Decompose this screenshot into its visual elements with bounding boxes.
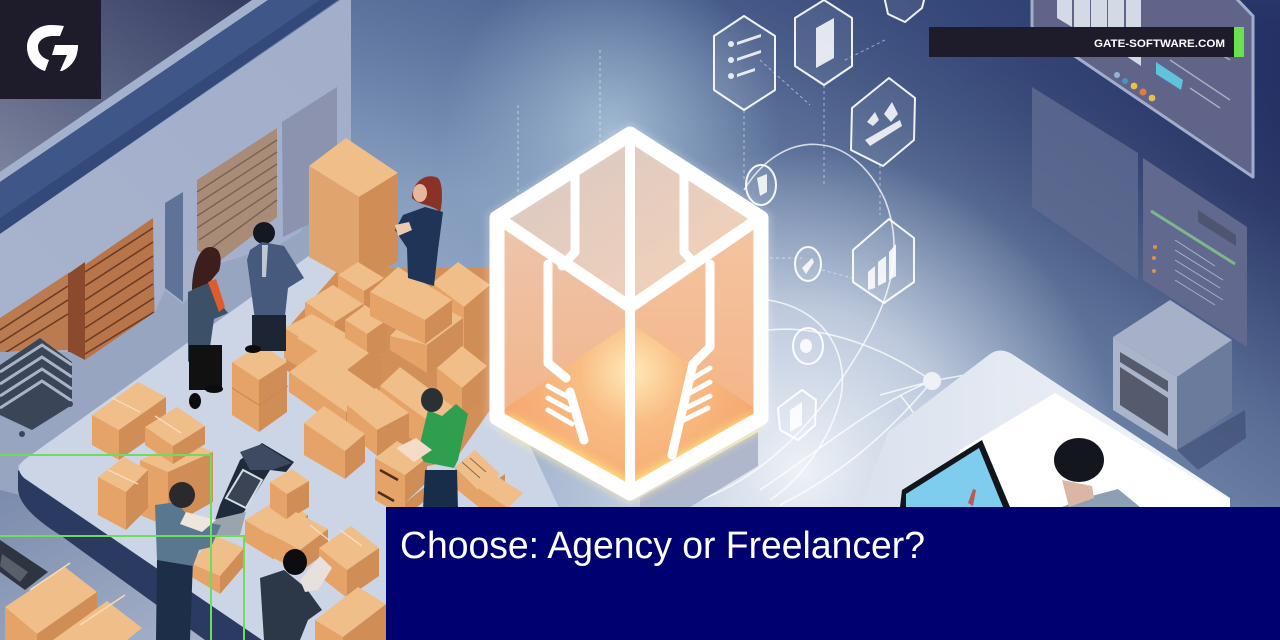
network node xyxy=(923,372,941,390)
cube floor shadow xyxy=(640,432,758,507)
metal cart xyxy=(0,338,73,437)
warehouse building xyxy=(0,0,351,370)
icon: circle small xyxy=(795,247,821,281)
small conveyor bottom-left xyxy=(0,540,48,590)
tall box xyxy=(309,138,398,285)
icon: bag hexagon xyxy=(778,390,816,440)
person at laptop xyxy=(1054,438,1140,507)
laptop xyxy=(900,440,1010,507)
icon: top partial hexagon xyxy=(884,0,925,22)
person: man in dark shirt xyxy=(260,549,332,640)
white desk xyxy=(860,350,1230,507)
icon: rating stars xyxy=(851,78,915,166)
network lines xyxy=(518,40,965,505)
website bar xyxy=(929,27,1244,57)
icon: checklist xyxy=(714,16,775,110)
green frame upper xyxy=(0,455,211,640)
platform xyxy=(18,255,560,640)
title text: Choose: Agency or Freelancer? xyxy=(400,525,925,567)
green accent xyxy=(1234,27,1244,57)
person: woman with brown hair xyxy=(188,247,228,409)
person: worker in green xyxy=(396,388,468,510)
icon: circle tag xyxy=(746,165,776,205)
dashboard bars xyxy=(1057,0,1141,66)
dashboard small icons xyxy=(1114,30,1230,108)
cube inner white lines xyxy=(498,135,760,492)
icon: document xyxy=(795,0,852,85)
cube outer frame xyxy=(497,134,761,493)
website text: GATE-SOFTWARE.COM xyxy=(1094,38,1225,50)
scanner machine xyxy=(212,443,294,535)
left stacked crates xyxy=(0,218,155,360)
server cabinet xyxy=(1113,300,1246,470)
narrow door xyxy=(165,192,183,302)
cube inner floor glow xyxy=(500,323,760,492)
icon: bar chart xyxy=(853,219,914,303)
lower floor xyxy=(0,235,310,500)
wall panel middle xyxy=(1032,87,1138,280)
grey door xyxy=(282,87,337,237)
wall xyxy=(0,0,351,370)
pile backing xyxy=(286,268,490,470)
wall panel with list xyxy=(1143,158,1247,347)
lower level bottom-left xyxy=(0,490,260,640)
roof edge band xyxy=(0,0,338,234)
roof xyxy=(0,0,252,172)
icon: circle face xyxy=(793,328,823,364)
title panel xyxy=(386,507,1280,640)
person: man in suit xyxy=(245,222,304,353)
glowing cube xyxy=(490,127,768,500)
box group: left cluster xyxy=(5,382,386,640)
person: woman with red hair xyxy=(395,176,443,286)
box group: main pile xyxy=(232,138,523,517)
icon: G logo xyxy=(27,25,78,71)
hexagon icons xyxy=(714,0,925,440)
wooden shutter xyxy=(197,128,277,263)
person: man with conveyor xyxy=(155,482,221,640)
cube halo xyxy=(494,131,764,496)
box tape xyxy=(30,398,362,625)
green frame lower xyxy=(0,536,244,640)
logo block xyxy=(0,0,101,99)
cube faces xyxy=(490,127,768,500)
dashboard panel top right xyxy=(1032,0,1253,177)
